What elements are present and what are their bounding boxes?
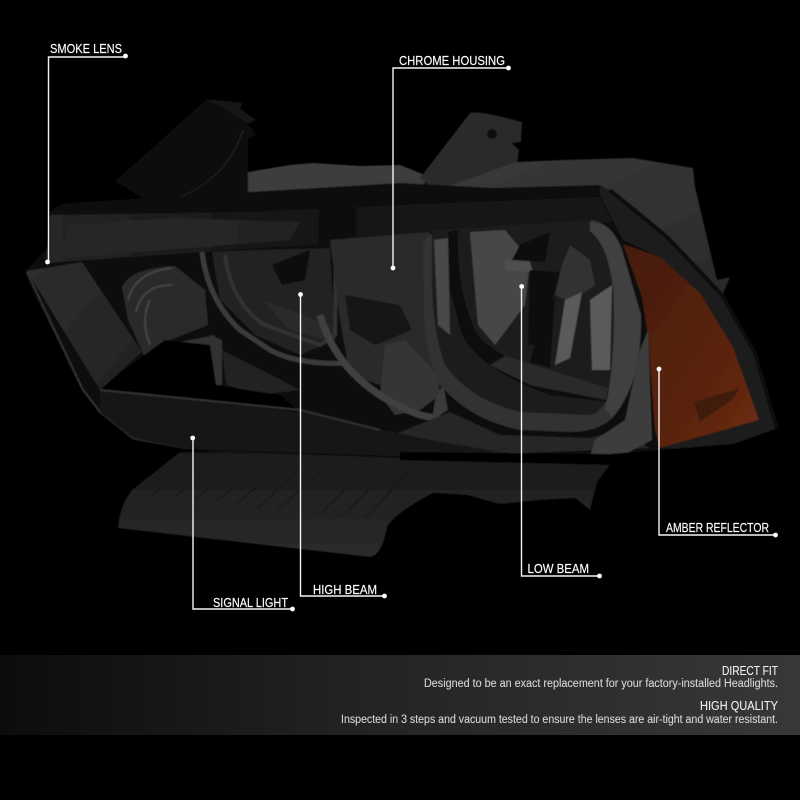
bumper ribs	[152, 460, 408, 519]
callout line	[48, 57, 125, 262]
grey right bezel arm	[590, 222, 641, 418]
bracket hole	[487, 129, 497, 139]
low beam bowl	[432, 220, 615, 415]
panel: features	[0, 655, 800, 735]
lens body	[25, 183, 778, 464]
callout line	[193, 438, 292, 609]
projector ribs	[128, 268, 172, 345]
centre lens dome	[380, 340, 440, 415]
callout: signal light	[190, 436, 295, 611]
corner reflector silver wedge	[590, 330, 652, 458]
callout dot	[657, 367, 661, 371]
rear grey housing	[248, 163, 425, 196]
callout label: LOW BEAM	[528, 562, 589, 576]
callout dot	[519, 284, 524, 289]
lens left edge	[27, 272, 187, 448]
fin inner edge	[165, 130, 243, 202]
callout: high beam	[298, 292, 387, 598]
inner curved shield	[448, 230, 608, 402]
carbon texture	[262, 300, 334, 342]
smoke lens left panel	[27, 262, 142, 390]
top chrome band	[46, 197, 612, 263]
callout: low beam	[519, 284, 602, 578]
diagonal strut	[320, 315, 470, 425]
chrome facets	[272, 250, 310, 285]
centre chrome housing	[330, 232, 440, 395]
amber texture	[694, 388, 740, 422]
rim black edge	[610, 190, 777, 428]
heading: direct fit: DIRECT FIT	[722, 664, 778, 678]
centre grey fill	[222, 350, 300, 395]
bottom rim	[400, 428, 778, 465]
callout: chrome housing	[391, 54, 511, 270]
amber reflector	[623, 244, 759, 448]
dark lower void	[100, 340, 300, 412]
panel background	[0, 655, 800, 735]
reflector facets	[505, 232, 612, 370]
inner bezel arc	[202, 252, 400, 363]
signal highlight	[100, 390, 380, 430]
headlight assembly	[25, 99, 778, 557]
centre facets	[345, 295, 412, 345]
right rear housing	[437, 158, 730, 296]
lower reflector pieces	[380, 412, 650, 456]
callout label: SIGNAL LIGHT	[213, 596, 288, 610]
text: direct fit description: Designed to be an exact replacement for your factory-installed Headlights.	[424, 678, 778, 690]
callout dot	[190, 436, 195, 440]
callout: amber reflector	[657, 367, 778, 537]
callout line	[300, 294, 384, 596]
callout label: SMOKE LENS	[50, 42, 122, 56]
callout dot	[123, 54, 128, 58]
callout label: CHROME HOUSING	[399, 54, 505, 68]
inner chrome	[212, 248, 335, 355]
callout line	[659, 369, 775, 535]
lower mounting bumper	[118, 450, 612, 557]
low beam outer bezel	[423, 220, 641, 432]
band highlight	[62, 218, 300, 258]
chrome arc	[225, 250, 336, 345]
heading: high quality: HIGH QUALITY	[700, 699, 779, 713]
callout label: HIGH BEAM	[313, 583, 377, 597]
high beam projector	[122, 266, 208, 360]
outer lens rim	[600, 185, 778, 450]
left mounting fin	[78, 99, 256, 206]
callout dot	[298, 292, 303, 297]
callout dot	[506, 66, 511, 70]
signal light bar	[100, 390, 500, 456]
callout line	[393, 68, 508, 268]
central connector	[165, 335, 222, 385]
callout label: AMBER REFLECTOR	[666, 521, 769, 535]
callout: smoke lens	[45, 42, 128, 264]
bulb socket	[555, 245, 595, 302]
strut branch	[432, 384, 448, 420]
callout line	[522, 287, 599, 576]
left silver facets	[434, 238, 450, 335]
low beam silver reflector	[470, 230, 530, 345]
right mounting bracket	[420, 112, 522, 192]
shield carbon band	[490, 356, 608, 400]
